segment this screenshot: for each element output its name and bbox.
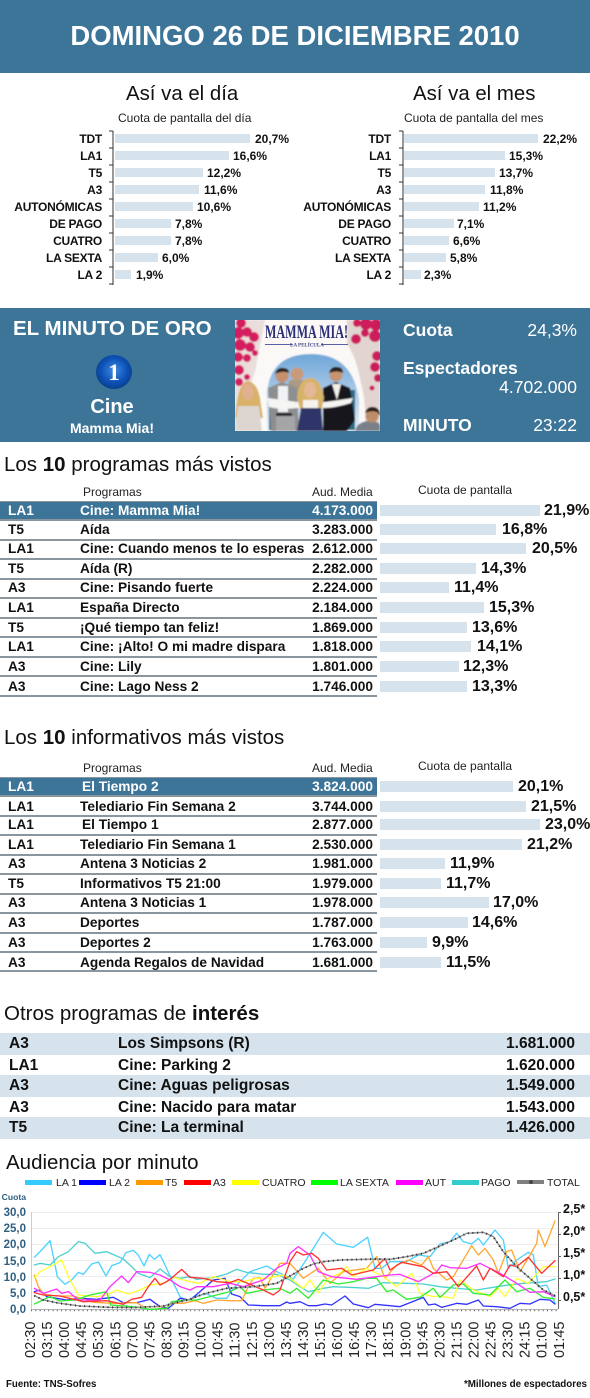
- time axis labels: 01:00: [535, 1321, 551, 1358]
- row: Aída: 3.283.000: [312, 522, 373, 537]
- row: Lily: Cine: Lily: [80, 659, 142, 674]
- bougainvillea left: [232, 318, 259, 386]
- row: El Tiempo 2: 20,1%: [518, 778, 563, 795]
- row: Nacido para matar: 1.543.000: [506, 1099, 575, 1116]
- row: Lago Ness 2: 13,3%: [472, 678, 517, 695]
- right axis labels: 1,0*: [563, 1268, 585, 1282]
- row: Antena 3 Noticias 2: Antena 3 Noticias 2: [80, 856, 206, 871]
- bar: T5 13,7%: 13,7%: [499, 166, 533, 180]
- bar: La Sexta 5,8%: LA SEXTA: [335, 251, 391, 265]
- legend: A3: [213, 1177, 226, 1189]
- row: Deportes: 1.787.000: [312, 915, 373, 930]
- table: los 10 programas más vistos: [0, 483, 589, 697]
- bar: Cuatro 7,8%: 7,8%: [175, 234, 202, 248]
- bar: T5 13,7%: T5: [377, 166, 391, 180]
- time axis labels: 23:30: [501, 1321, 517, 1358]
- time axis labels: 22:45: [484, 1321, 500, 1358]
- heading: los 10 informativos: Los 10 informativos más vistos: [4, 726, 284, 749]
- bar: T5 13,7%: [377, 166, 533, 180]
- row: Telediario FS 2: 3.744.000: [312, 799, 373, 814]
- line: PAGO: [34, 1242, 555, 1292]
- grey suit man: [268, 382, 299, 431]
- row: Qué tiempo tan feliz: 1.869.000: [312, 620, 373, 635]
- row: Antena 3 Noticias 1: Antena 3 Noticias 1: [80, 895, 206, 910]
- row: Cuando menos te lo esperas: [8, 540, 577, 557]
- left axis labels: 15,0: [4, 1256, 26, 1268]
- row: España Directo: 15,3%: [489, 599, 534, 616]
- row: España Directo: [8, 599, 534, 616]
- row: Cine Mamma Mia: LA1: [8, 503, 34, 518]
- bar: T5 12,2%: T5: [88, 166, 102, 180]
- row: España Directo: 2.184.000: [312, 600, 373, 615]
- row: Aída: Aída: [80, 522, 110, 537]
- line: A3: [34, 1252, 555, 1304]
- right axis labels: 1,5*: [563, 1246, 585, 1260]
- bar: TDT 20,7%: TDT: [79, 132, 102, 146]
- bar: Cuatro 7,8%: [53, 234, 202, 248]
- time axis labels: 14:30: [296, 1321, 312, 1358]
- image: movie poster: LA PELÍCULA: [290, 342, 324, 348]
- row: Cine Mamma Mia: [8, 502, 589, 519]
- row: El Tiempo 2: LA1: [8, 779, 34, 794]
- time axis labels: 11:30: [228, 1323, 244, 1358]
- time axis labels: 13:00: [262, 1321, 278, 1358]
- time axis labels: 07:00: [125, 1321, 141, 1358]
- bar: Autonómicas 11,2%: [303, 200, 516, 214]
- panel: así va el día: [14, 83, 289, 285]
- row: Cine Mamma Mia: 4.173.000: [312, 503, 373, 518]
- row: Pisando fuerte: 2.224.000: [312, 580, 373, 595]
- row: Qué tiempo tan feliz: 13,6%: [472, 619, 517, 636]
- bar: Cuatro 7,8%: CUATRO: [53, 234, 102, 248]
- header band: title: DOMINGO 26 DE DICIEMBRE 2010: [70, 20, 520, 51]
- bar: Autonómicas 11,2%: AUTONÓMICAS: [303, 200, 391, 214]
- row: Pisando fuerte: Cine: Pisando fuerte: [80, 580, 213, 595]
- column headers: Programas: [83, 485, 142, 499]
- row: Telediario FS 1: 2.530.000: [312, 837, 373, 852]
- row: Lily: 1.801.000: [312, 659, 373, 674]
- right axis labels: 0,5*: [563, 1290, 585, 1304]
- row: Telediario FS 2: LA1: [8, 799, 34, 814]
- legend: LA 2: [109, 1177, 130, 1189]
- row: Antena 3 Noticias 2: A3: [8, 856, 26, 871]
- heading: mes: Así va el mes: [413, 83, 535, 105]
- row: Antena 3 Noticias 1: A3: [8, 895, 26, 910]
- bottom right man: [355, 421, 380, 431]
- row: Cuando menos te lo esperas: 2.612.000: [312, 541, 373, 556]
- row: Lago Ness 2: [8, 678, 517, 695]
- line: T5: [34, 1221, 555, 1307]
- bar: A3 11,6%: [87, 183, 238, 197]
- bar: La Sexta 5,8%: [335, 251, 477, 265]
- row: Cine Mamma Mia: Cine: Mamma Mia!: [80, 503, 200, 518]
- left blonde woman: [235, 381, 263, 418]
- heading: audiencia por minuto: Audiencia por minuto: [6, 1151, 199, 1174]
- bar: T5 12,2%: 12,2%: [207, 166, 241, 180]
- column headers: Programas: [83, 761, 142, 775]
- left axis labels: 20,0: [4, 1239, 26, 1251]
- column headers: Cuota de pantalla: [418, 483, 512, 497]
- row: Lily: 12,3%: [463, 658, 508, 675]
- row: Aída: [8, 521, 547, 538]
- bar: La Sexta 6,0%: [46, 251, 189, 265]
- row: España Directo: LA1: [8, 600, 34, 615]
- row: Lago Ness 2: Cine: Lago Ness 2: [80, 679, 199, 694]
- header band: title: [0, 0, 590, 73]
- row: Lago Ness 2: A3: [8, 679, 26, 694]
- row: Informativos T5: 1.979.000: [312, 876, 373, 891]
- line: LA SEXTA: [34, 1278, 555, 1309]
- row: Antena 3 Noticias 2: 11,9%: [450, 855, 494, 872]
- row: Cuando menos te lo esperas: 20,5%: [532, 540, 577, 557]
- row: Aída (R): Aída (R): [80, 561, 132, 576]
- bar: TDT 22,2%: TDT: [368, 132, 391, 146]
- time axis labels: 10:00: [194, 1321, 210, 1358]
- row: Alto o mi madre dispara: 14,1%: [477, 638, 522, 655]
- row: Nacido para matar: [0, 1097, 590, 1119]
- row: El Tiempo 1: 2.877.000: [312, 817, 373, 832]
- row: Telediario FS 1: LA1: [8, 837, 34, 852]
- row: Alto o mi madre dispara: 1.818.000: [312, 639, 373, 654]
- bar: Autonómicas 10,6%: AUTONÓMICAS: [14, 200, 102, 214]
- row: Telediario FS 2: [0, 797, 590, 817]
- row: Telediario FS 1: [0, 835, 590, 855]
- row: Deportes: A3: [8, 915, 26, 930]
- row: Informativos T5: T5: [8, 876, 24, 891]
- row: Aída: T5: [8, 522, 24, 537]
- bar: La Sexta 6,0%: LA SEXTA: [46, 251, 102, 265]
- time axis labels: 15:15: [313, 1321, 329, 1358]
- row: Deportes 2: [0, 933, 590, 953]
- chart axis: día: [109, 130, 114, 285]
- row: Deportes 2: Deportes 2: [80, 935, 151, 950]
- icon: La 1 logo: 1: [108, 360, 120, 385]
- stat: espectadores: Espectadores: [403, 358, 518, 378]
- row: El Tiempo 2: [0, 777, 590, 797]
- bar: Cuatro 6,6%: [342, 234, 480, 248]
- subheading: día: Cuota de pantalla del día: [118, 111, 251, 125]
- bar: TDT 22,2%: [368, 132, 577, 146]
- left axis labels: 10,0: [4, 1272, 26, 1284]
- chart axis: mes: [399, 130, 404, 285]
- row: Aguas peligrosas: [0, 1075, 590, 1097]
- bar: La 2 2,3%: [366, 268, 451, 282]
- time axis labels: 20:30: [432, 1321, 448, 1358]
- stat: espectadores: 4.702.000: [499, 377, 577, 397]
- row: Agenda Regalos: 11,5%: [446, 954, 490, 971]
- panel: así va el mes: [303, 83, 577, 285]
- bar: Autonómicas 10,6%: 10,6%: [197, 200, 231, 214]
- legend: LA SEXTA: [340, 1177, 389, 1189]
- time axis labels: 13:45: [279, 1321, 295, 1358]
- bar: TDT 20,7%: 20,7%: [255, 132, 289, 146]
- row: Qué tiempo tan feliz: ¡Qué tiempo tan feliz!: [80, 620, 219, 635]
- row: El Tiempo 1: 23,0%: [545, 816, 590, 833]
- stat: cuota: Cuota: [403, 320, 453, 340]
- row: España Directo: España Directo: [80, 600, 180, 615]
- gridlines and axes: [31, 1212, 561, 1310]
- time axis labels: 04:45: [74, 1321, 90, 1358]
- stat: minuto: 23:22: [533, 415, 577, 435]
- panel: el minuto de oro: [0, 308, 590, 442]
- time axis labels: 03:15: [40, 1321, 56, 1358]
- footer: source: Fuente: TNS-Sofres: [6, 1379, 96, 1390]
- legend: LA 1: [56, 1177, 77, 1189]
- legend: TOTAL: [547, 1177, 580, 1189]
- row: Parking 2: Cine: Parking 2: [118, 1057, 231, 1074]
- row: Pisando fuerte: 11,4%: [454, 579, 498, 596]
- legend: [25, 1177, 580, 1189]
- time axis labels: [23, 1321, 568, 1358]
- row: Aída: 16,8%: [502, 521, 547, 538]
- column headers: Aud. Media: [312, 485, 373, 499]
- row: Parking 2: 1.620.000: [506, 1057, 575, 1074]
- row: El Tiempo 2: 3.824.000: [312, 779, 373, 794]
- row: La terminal: Cine: La terminal: [118, 1119, 244, 1136]
- row: Pisando fuerte: [8, 579, 498, 596]
- bar: De pago 7,1%: 7,1%: [457, 217, 484, 231]
- row: Alto o mi madre dispara: Cine: ¡Alto! O mi madre dispara: [80, 639, 285, 654]
- text: Mamma Mia: Mamma Mia!: [70, 420, 154, 436]
- bar: A3 11,8%: A3: [376, 183, 391, 197]
- time axis labels: 04:00: [57, 1321, 73, 1358]
- subheading: mes: Cuota de pantalla del mes: [404, 111, 543, 125]
- time axis labels: 12:15: [245, 1321, 261, 1358]
- bar: TDT 22,2%: 22,2%: [543, 132, 577, 146]
- row: Cuando menos te lo esperas: LA1: [8, 541, 34, 556]
- line: LA 2: [34, 1278, 555, 1308]
- back man: [290, 368, 304, 380]
- line: AUT: [34, 1247, 555, 1300]
- row: Aída (R): T5: [8, 561, 24, 576]
- row: Cuando menos te lo esperas: Cine: Cuando menos te lo esperas: [80, 541, 304, 556]
- bar: LA1 16,6%: LA1: [80, 149, 102, 163]
- row: Aída (R): 14,3%: [481, 560, 526, 577]
- row: Antena 3 Noticias 1: [0, 893, 590, 913]
- row: El Tiempo 2: El Tiempo 2: [82, 779, 159, 794]
- time axis labels: 18:15: [381, 1321, 397, 1358]
- time axis labels: 06:15: [108, 1321, 124, 1358]
- stat: espectadores: [403, 358, 577, 397]
- left axis labels: 30,0: [4, 1207, 26, 1219]
- data lines: [34, 1221, 555, 1309]
- row: Los Simpsons: Los Simpsons (R): [118, 1035, 250, 1052]
- bar: La 2 2,3%: LA 2: [366, 268, 391, 282]
- row: Deportes 2: A3: [8, 935, 26, 950]
- bar: La Sexta 5,8%: 5,8%: [450, 251, 477, 265]
- time axis labels: 09:15: [176, 1321, 192, 1358]
- bar: LA1 15,3%: [369, 149, 543, 163]
- time axis labels: 01:45: [552, 1321, 568, 1358]
- row: Informativos T5: [0, 874, 590, 894]
- row: Informativos T5: 11,7%: [446, 875, 490, 892]
- column headers: [0, 761, 590, 775]
- time axis labels: 16:00: [330, 1321, 346, 1358]
- stat: cuota: [403, 320, 577, 340]
- bar: A3 11,6%: A3: [87, 183, 102, 197]
- column headers: Aud. Media: [312, 761, 373, 775]
- row: Telediario FS 1: 21,2%: [527, 836, 572, 853]
- column headers: Cuota de pantalla: [418, 759, 512, 773]
- row: Deportes: Deportes: [80, 915, 139, 930]
- left axis labels: 5,0: [10, 1288, 26, 1300]
- bar: Cuatro 6,6%: 6,6%: [453, 234, 480, 248]
- row: Aguas peligrosas: 1.549.000: [506, 1077, 575, 1094]
- stat: minuto: MINUTO: [403, 415, 472, 435]
- bar: A3 11,6%: 11,6%: [204, 183, 237, 197]
- left axis labels: 0,0: [10, 1304, 26, 1316]
- row: Nacido para matar: A3: [9, 1099, 29, 1116]
- right axis labels: 2,0*: [563, 1224, 585, 1238]
- bar: Cuatro 6,6%: CUATRO: [342, 234, 391, 248]
- time axis labels: 07:45: [142, 1321, 158, 1358]
- row: Alto o mi madre dispara: [8, 638, 522, 655]
- bar: De pago 7,1%: [338, 217, 484, 231]
- bar: De pago 7,8%: 7,8%: [175, 217, 202, 231]
- row: La terminal: 1.426.000: [506, 1119, 575, 1136]
- line chart: audiencia por minuto: [0, 1170, 590, 1365]
- row: Qué tiempo tan feliz: T5: [8, 620, 24, 635]
- heading: otros programas: Otros programas de interés: [4, 1002, 259, 1025]
- row: El Tiempo 1: El Tiempo 1: [82, 817, 159, 832]
- row: Lily: A3: [8, 659, 26, 674]
- time axis labels: 05:30: [91, 1321, 107, 1358]
- row: Agenda Regalos: Agenda Regalos de Navidad: [80, 955, 264, 970]
- bougainvillea right: [351, 318, 382, 390]
- bar: LA1 16,6%: 16,6%: [233, 149, 267, 163]
- time axis labels: 24:15: [518, 1321, 534, 1358]
- bar: La 2 2,3%: 2,3%: [424, 268, 451, 282]
- legend: AUT: [425, 1177, 447, 1189]
- row: Lago Ness 2: 1.746.000: [312, 679, 373, 694]
- time axis labels: 10:45: [211, 1321, 227, 1358]
- icon: La 1 logo: [96, 355, 132, 389]
- heading: minuto de oro: EL MINUTO DE ORO: [13, 317, 212, 340]
- bar: LA1 15,3%: LA1: [369, 149, 391, 163]
- time axis labels: 19:45: [415, 1321, 431, 1358]
- row: Aguas peligrosas: Cine: Aguas peligrosas: [118, 1077, 290, 1094]
- bar: Autonómicas 11,2%: 11,2%: [483, 200, 516, 214]
- center woman: [297, 378, 324, 412]
- line: CUATRO: [34, 1260, 555, 1298]
- time axis labels: 16:45: [347, 1321, 363, 1358]
- footer: note: *Millones de espectadores: [464, 1379, 587, 1390]
- row: Antena 3 Noticias 1: 1.978.000: [312, 895, 373, 910]
- time axis labels: 02:30: [23, 1321, 39, 1358]
- left axis labels: Cuota: [2, 1192, 26, 1202]
- table: otros programas de interés: [0, 1033, 590, 1139]
- legend: CUATRO: [262, 1177, 306, 1189]
- stat: minuto: [403, 415, 577, 435]
- bar: TDT 20,7%: [79, 132, 289, 146]
- right axis labels: 2,5*: [563, 1202, 585, 1216]
- row: Nacido para matar: Cine: Nacido para matar: [118, 1099, 296, 1116]
- row: Aída (R): 2.282.000: [312, 561, 373, 576]
- time axis labels: 21:15: [450, 1321, 466, 1358]
- row: Antena 3 Noticias 2: [0, 854, 590, 874]
- row: Aída (R): [8, 560, 526, 577]
- legend: PAGO: [481, 1177, 511, 1189]
- heading: día: Así va el día: [126, 83, 238, 105]
- bar: Autonómicas 10,6%: [14, 200, 231, 214]
- bar: La 2 1,9%: [77, 268, 163, 282]
- row: La terminal: T5: [9, 1119, 27, 1136]
- row: Informativos T5: Informativos T5 21:00: [80, 876, 221, 891]
- row: Agenda Regalos: 1.681.000: [312, 955, 373, 970]
- bar: LA1 15,3%: 15,3%: [509, 149, 543, 163]
- row: Deportes: [0, 913, 590, 933]
- heading: los 10 programas: Los 10 programas más vistos: [4, 453, 272, 476]
- bar: De pago 7,8%: DE PAGO: [49, 217, 102, 231]
- row: Antena 3 Noticias 2: 1.981.000: [312, 856, 373, 871]
- bar: LA1 16,6%: [80, 149, 267, 163]
- bar: De pago 7,1%: DE PAGO: [338, 217, 391, 231]
- row: El Tiempo 1: LA1: [8, 817, 34, 832]
- bar: T5 12,2%: [88, 166, 241, 180]
- row: Agenda Regalos: A3: [8, 955, 26, 970]
- bar: La Sexta 6,0%: 6,0%: [162, 251, 189, 265]
- row: Telediario FS 1: Telediario Fin Semana 1: [80, 837, 236, 852]
- stat: cuota: 24,3%: [527, 320, 577, 340]
- row: Deportes 2: 1.763.000: [312, 935, 373, 950]
- line: LA 1: [34, 1230, 555, 1303]
- row: Los Simpsons: [0, 1033, 590, 1055]
- time axis labels: 19:00: [398, 1321, 414, 1358]
- sleeves: [267, 398, 353, 409]
- row: Agenda Regalos: [0, 953, 590, 973]
- bar: A3 11,8%: [376, 183, 524, 197]
- time axis labels: 17:30: [364, 1321, 380, 1358]
- bar: La 2 1,9%: 1,9%: [136, 268, 163, 282]
- left axis labels: [2, 1192, 26, 1316]
- column headers: [83, 483, 512, 499]
- table: los 10 informativos más vistos: [0, 755, 590, 973]
- row: Telediario FS 2: Telediario Fin Semana 2: [80, 799, 236, 814]
- time axis labels: 08:30: [160, 1321, 176, 1358]
- image: movie poster: [235, 320, 380, 431]
- row: Lily: [8, 658, 508, 675]
- right axis labels: [563, 1202, 585, 1304]
- row: Alto o mi madre dispara: LA1: [8, 639, 34, 654]
- row: Cine Mamma Mia: 21,9%: [544, 502, 589, 519]
- bar: A3 11,8%: 11,8%: [490, 183, 523, 197]
- row: Deportes: 14,6%: [472, 914, 517, 931]
- row: Qué tiempo tan feliz: [8, 619, 517, 636]
- left axis labels: 25,0: [4, 1223, 26, 1235]
- row: Parking 2: LA1: [9, 1057, 38, 1074]
- row: Los Simpsons: 1.681.000: [506, 1035, 575, 1052]
- line: TOTAL: [34, 1232, 555, 1308]
- bar: De pago 7,8%: [49, 217, 202, 231]
- row: Pisando fuerte: A3: [8, 580, 26, 595]
- time axis labels: 22:00: [466, 1321, 482, 1358]
- row: Los Simpsons: A3: [9, 1035, 29, 1052]
- row: Parking 2: [0, 1055, 590, 1077]
- bar: La 2 1,9%: LA 2: [77, 268, 102, 282]
- row: Telediario FS 2: 21,5%: [531, 798, 576, 815]
- row: Deportes 2: 9,9%: [432, 934, 468, 951]
- text: Cine: Cine: [90, 396, 134, 418]
- row: Aguas peligrosas: A3: [9, 1077, 29, 1094]
- legend: T5: [165, 1177, 177, 1189]
- black suit man: [323, 382, 355, 431]
- row: La terminal: [0, 1117, 590, 1139]
- row: Antena 3 Noticias 1: 17,0%: [493, 894, 538, 911]
- row: El Tiempo 1: [0, 815, 590, 835]
